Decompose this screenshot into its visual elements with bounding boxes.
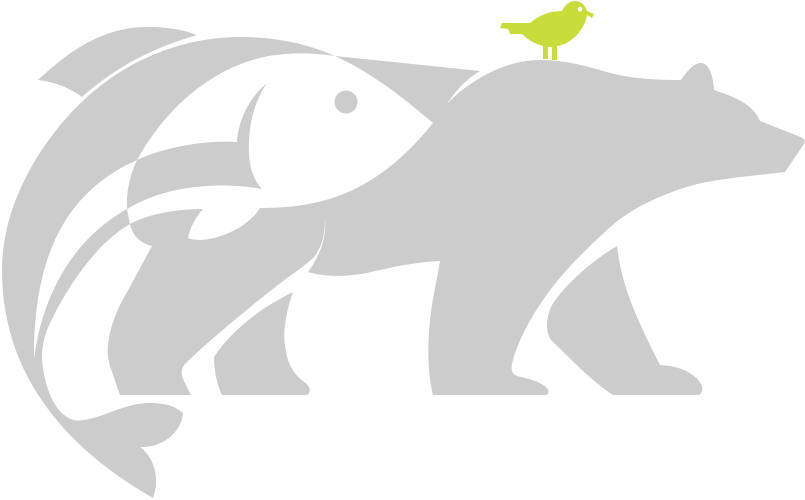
fish head, collar and pectoral fin cut-out	[127, 53, 433, 240]
bear rear leg	[214, 292, 310, 395]
fish eye	[334, 90, 358, 114]
fish dorsal fin	[38, 27, 197, 97]
bear far front leg	[547, 246, 702, 395]
icon: green bird	[500, 1, 594, 60]
fish side crescent cut-out	[34, 160, 137, 360]
